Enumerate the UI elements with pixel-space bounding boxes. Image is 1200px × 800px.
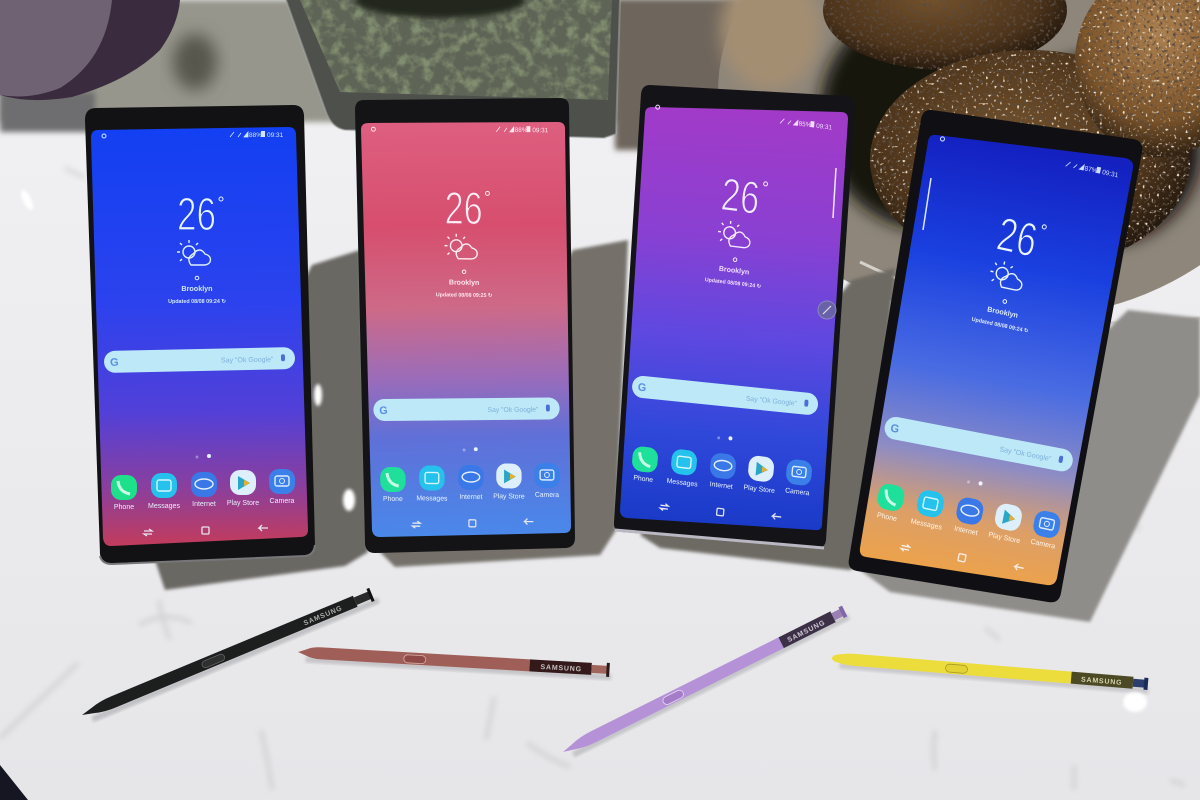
stylus 3: lavender: SAMSUNG [787,619,827,644]
weather icon [988,259,1026,291]
page dots [967,479,983,486]
status bar: 09:31 [816,123,833,132]
navigation keys [901,539,1024,576]
app dock: Camera [270,498,295,505]
glass vase with moss [286,0,620,138]
status bar: 09:31 [1101,169,1119,179]
reflection band at the top of the table [0,0,1200,150]
search bar [631,375,819,416]
phone 2 screen [361,122,571,537]
phone 3 body [614,85,855,548]
plate behind the bagels [718,0,1200,323]
phone 3 bottom edge [615,530,824,548]
city: Brooklyn [449,278,479,287]
phone 3 edge highlight [833,168,836,218]
app dock: Messages [416,495,448,503]
status bar: 85% [798,121,812,129]
stylus 2: copper: SAMSUNG [540,664,582,673]
phone 3 screen [620,107,848,530]
app dock: Camera [785,487,810,497]
app dock: Play Store [988,531,1021,545]
status bar: 88% [515,127,528,134]
navigation keys [660,499,781,525]
app dock: Internet [709,481,733,491]
search bar: G [110,357,119,369]
phone 2: copper [355,98,575,553]
app dock: Messages [666,478,698,489]
app dock [380,461,560,505]
app dock: Phone [876,511,898,523]
temperature: 26 [445,182,483,234]
degree mark [486,191,489,195]
status bar: 09:31 [532,127,549,134]
update time: Updated 08/08 09:24 ↻ [705,277,761,290]
bagels [820,0,1200,270]
app dock: Camera [1030,538,1056,551]
app dock: Messages [910,517,943,532]
temperature: 26 [177,188,216,240]
navigation keys [144,525,268,536]
city: Brooklyn [987,304,1019,320]
search bar [104,347,295,373]
phone 4 body [849,110,1142,602]
phone 3: lavender [614,85,855,548]
search bar: G [637,381,647,394]
status bar: 09:31 [267,132,284,139]
app dock: Play Store [493,493,525,501]
phone 1 interface [102,131,295,536]
degree mark [1042,224,1047,229]
location pin [1003,299,1007,304]
weather icon [445,234,477,259]
search bar: Say "Ok Google" [999,445,1052,463]
location pin [195,276,199,280]
table light reflections [19,188,1147,712]
degree mark [219,197,223,201]
search bar: Say "Ok Google" [487,407,539,414]
status bar: 88% [249,132,262,139]
search bar: Say "Ok Google" [746,395,798,408]
phone 1 bottom edge [100,545,315,564]
city: Brooklyn [719,265,750,277]
phone 1: black [85,105,315,564]
search bar: G [889,422,900,436]
location pin [733,258,737,262]
phone 3 edge panel handle [818,301,836,319]
app dock: Internet [459,494,483,501]
app dock [873,476,1062,557]
phone 3 interface [619,102,844,528]
update time: Updated 08/08 09:24 ↻ [168,299,226,305]
search bar [373,397,560,421]
status bar: 87% [1084,165,1098,175]
app dock: Phone [383,496,403,503]
app dock: Camera [535,492,559,499]
phone shadows on the table [155,240,1200,622]
phone 4 screen [860,135,1133,585]
status bar [655,102,833,132]
app dock: Phone [633,475,653,484]
stylus 4: yellow [831,652,1149,694]
app dock [630,440,813,503]
stylus 3: lavender [560,605,850,761]
status bar [940,133,1119,179]
weather icon [717,219,752,248]
dark purple bowl, top left [0,0,180,100]
stylus 2: copper [297,645,612,680]
search bar [883,415,1075,473]
phone 1 body [85,105,315,564]
stylus 1: black [79,586,380,725]
stylus 1: black: SAMSUNG [303,605,344,627]
phone 2 body [355,98,575,553]
status bar [371,124,549,134]
app dock: Messages [148,503,180,510]
city: Brooklyn [181,284,213,293]
stylus 4: yellow: SAMSUNG [1081,676,1123,687]
app dock: Play Store [743,484,775,495]
update time: Updated 08/08 09:24 ↻ [971,317,1029,335]
temperature: 26 [993,207,1041,267]
phone 4 interface [860,133,1131,582]
temperature: 26 [719,168,762,224]
page dots [463,447,478,452]
status bar [102,131,284,139]
degree mark [763,182,768,186]
phone 4 edge highlight [923,178,931,230]
page dots [717,435,733,441]
weather icon [177,240,210,265]
search bar: Say "Ok Google" [221,356,274,365]
phone 2 interface [371,124,560,530]
page dots [196,454,211,458]
navigation keys [412,517,533,530]
app dock: Internet [192,501,216,508]
app dock: Phone [114,504,134,511]
update time: Updated 08/08 09:25 ↻ [436,292,492,299]
location pin [462,270,466,274]
app dock: Play Store [227,500,259,507]
phone 1 screen [91,127,308,546]
app dock [111,469,295,511]
phone 4: blue [849,110,1142,602]
search bar: G [379,405,388,417]
app dock: Internet [953,524,978,537]
